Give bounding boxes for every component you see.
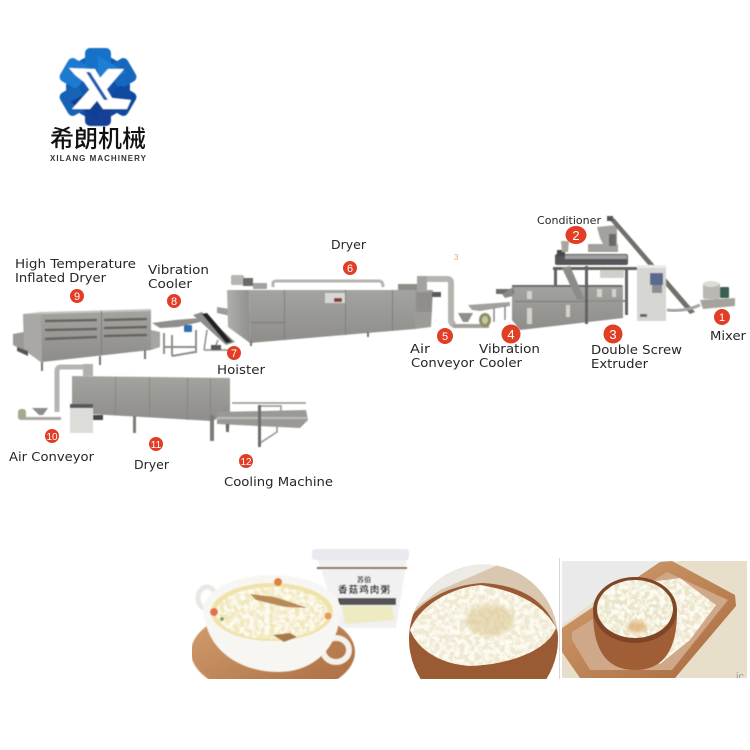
- control panel: [325, 293, 345, 303]
- label: vibration cooler 8: Cooler: [148, 277, 192, 291]
- label: conditioner: Conditioner: [537, 214, 601, 227]
- photo: bowl of rice: [405, 560, 561, 680]
- badge 10: 10: [46, 432, 58, 443]
- badge 3: 3: [609, 327, 617, 342]
- machine labels: [9, 214, 746, 489]
- badge 7: 7: [231, 348, 237, 360]
- badge 8: 8: [171, 296, 177, 308]
- photo: congee bowl and cup: [192, 549, 409, 679]
- label: vibration cooler 4: Cooler: [479, 356, 522, 370]
- label: mixer: Mixer: [710, 329, 746, 343]
- photo divider: [559, 558, 560, 679]
- extruder support frame: [553, 266, 637, 324]
- soup bowl: [198, 575, 349, 672]
- machine 1: mixer: [667, 281, 735, 310]
- machine 3: double screw extruder: [496, 216, 695, 330]
- product cup: [312, 549, 409, 628]
- badge 2: [566, 226, 586, 244]
- icon: blue gear with X: [58, 48, 138, 126]
- control box: [70, 404, 93, 433]
- badge 2: 2: [572, 228, 580, 243]
- label: dryer 11: Dryer: [134, 458, 169, 472]
- logo Chinese name: 希朗机械: [50, 119, 146, 154]
- watermark: jc: [735, 671, 744, 683]
- label: air conveyor 5: Conveyor: [411, 356, 474, 370]
- badge 4: 4: [507, 327, 515, 342]
- badge 11: [149, 437, 163, 451]
- label: double screw extruder: Double Screw: [591, 343, 682, 357]
- label: vibration cooler 8: [148, 263, 209, 291]
- badge 7: [227, 346, 241, 360]
- label: high temperature inflated dryer: [15, 257, 136, 285]
- logo English name: XILANG MACHINERY: [50, 154, 147, 163]
- machine 7: hoister: [193, 312, 235, 350]
- machine 11: dryer: [70, 364, 230, 441]
- company logo: [50, 48, 147, 163]
- cup brand text: 苏伯: [357, 575, 371, 585]
- badge 10: [45, 429, 59, 443]
- badge 6: 6: [347, 263, 353, 275]
- label: high temperature inflated dryer: High Temperature: [15, 257, 136, 271]
- label: vibration cooler 8: Vibration: [148, 263, 209, 277]
- machine 12: cooling machine: [217, 403, 308, 447]
- wooden plate: [192, 625, 356, 679]
- cup product name: 香菇鸡肉粥: [338, 582, 390, 596]
- label: double screw extruder: Extruder: [591, 357, 648, 371]
- badge 5: 5: [442, 331, 448, 343]
- machine 8: vibration cooler: [152, 318, 200, 356]
- label: hoister: Hoister: [217, 363, 265, 377]
- label: dryer 6: Dryer: [331, 238, 366, 252]
- badge 1: [714, 309, 730, 325]
- label: double screw extruder: [591, 343, 682, 371]
- machine 9: high temperature inflated dryer: [13, 309, 160, 371]
- machine 4: vibration cooler: [468, 302, 510, 327]
- label: vibration cooler 4: [479, 342, 540, 370]
- control cabinet: [637, 265, 666, 321]
- badge 12: 12: [240, 457, 252, 468]
- machine 6: dryer: [217, 275, 441, 346]
- wooden bowl: [593, 612, 677, 670]
- label: air conveyor 10: Air Conveyor: [9, 450, 94, 464]
- badge 5: [437, 328, 453, 344]
- step number badges: [45, 226, 730, 468]
- screw conveyor: [607, 216, 695, 314]
- badge 1: 1: [719, 312, 725, 324]
- machine 5: air conveyor: [417, 276, 489, 328]
- motor: [231, 275, 267, 289]
- badge 9: [70, 289, 84, 303]
- badge 8: [167, 294, 181, 308]
- machine 10: air conveyor: [18, 367, 84, 420]
- conditioner hopper: [597, 225, 617, 248]
- loose rice: [656, 578, 716, 664]
- extruder base: [512, 285, 623, 330]
- stray orange number: 3: [454, 253, 459, 262]
- label: air conveyor 5: Air: [410, 342, 430, 356]
- top air pipe: [273, 281, 383, 287]
- label: high temperature inflated dryer: Inflated Dryer: [15, 271, 106, 285]
- wiring box: [600, 270, 624, 278]
- badge 11: 11: [151, 440, 162, 451]
- label: cooling machine: Cooling Machine: [224, 475, 333, 489]
- photo: rice in wooden tray: [562, 561, 747, 683]
- label: vibration cooler 4: Vibration: [479, 342, 540, 356]
- badge 9: 9: [74, 291, 80, 303]
- badge 3: [604, 324, 622, 344]
- label: air conveyor 5: [410, 342, 474, 370]
- badge 6: [343, 261, 357, 275]
- badge 12: [239, 454, 253, 468]
- extruder barrel: [555, 241, 628, 265]
- badge 4: [502, 324, 520, 344]
